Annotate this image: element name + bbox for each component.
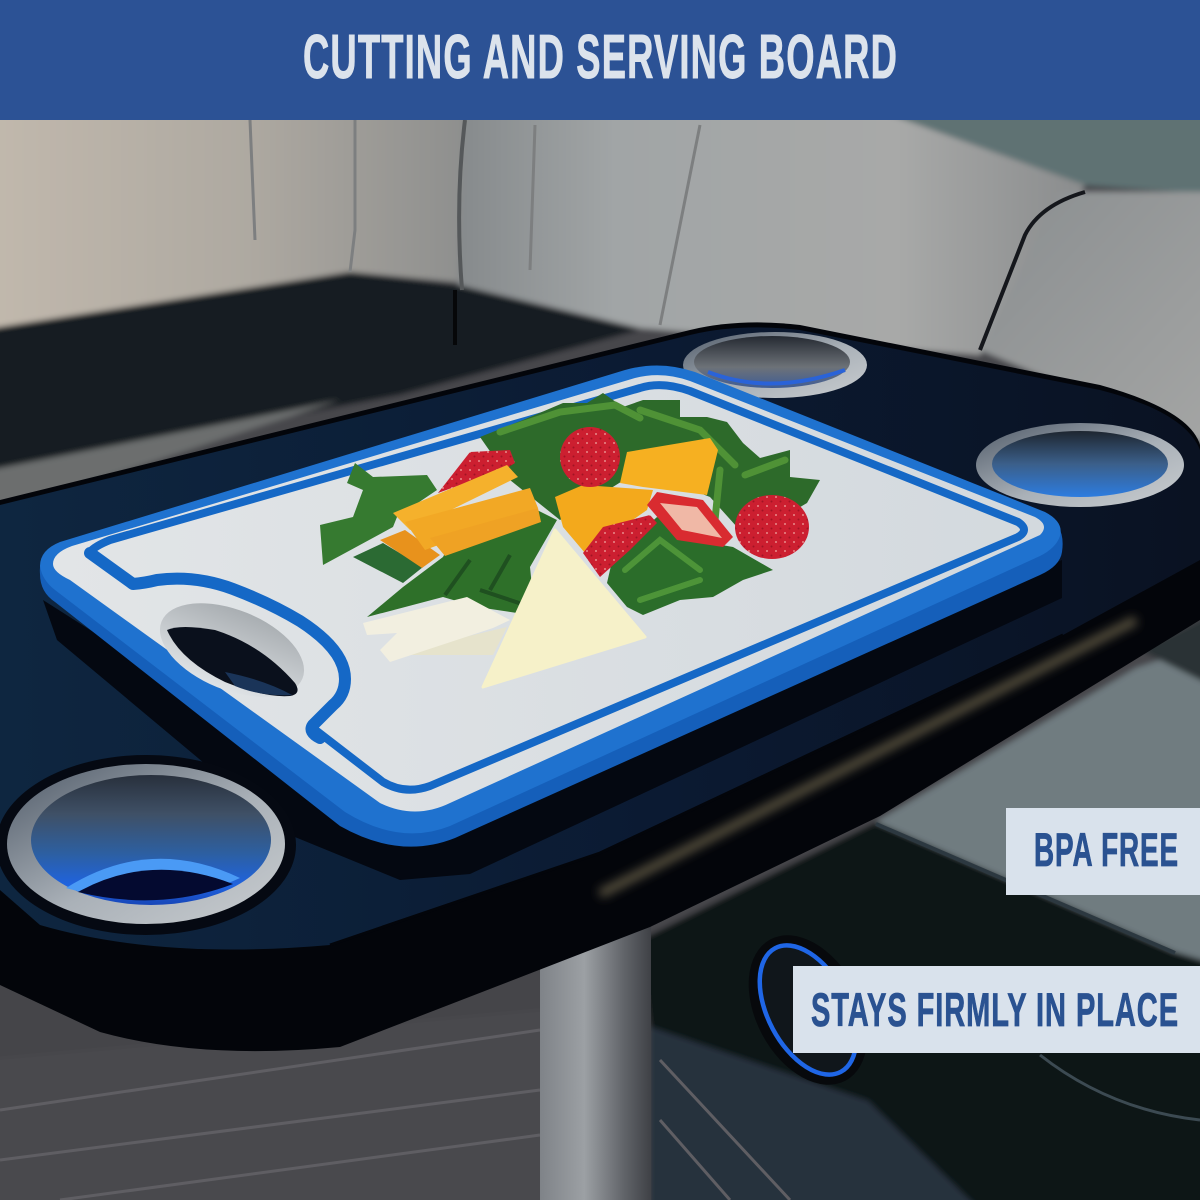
strawberry slice: [647, 492, 733, 547]
table top surface: [0, 327, 1200, 950]
mango top: [620, 438, 718, 495]
panel: cutting board: [40, 365, 1063, 847]
handle cut-out: [147, 584, 317, 716]
board shadow: [43, 560, 1062, 880]
dark seat front: [640, 822, 1200, 1200]
callout: stays firmly in place: [793, 966, 1200, 1053]
table post: [540, 915, 651, 1200]
right backrest: [980, 192, 1200, 450]
floor left: [0, 960, 540, 1200]
title banner: [0, 0, 1200, 120]
icon: cup holder front left: [0, 755, 296, 935]
orange cheese slices: [380, 530, 440, 568]
juice groove: [90, 385, 1024, 790]
table edge highlight: [600, 620, 1136, 894]
board white surface: [53, 375, 1044, 812]
board blue rim: [40, 365, 1061, 833]
cheese wedge: [483, 530, 645, 687]
mango centre: [555, 485, 653, 553]
board side: [40, 368, 1063, 847]
strawberry left: [438, 450, 515, 493]
floor under table, right: [650, 1027, 990, 1200]
icon: air vent with blue light: [725, 915, 891, 1105]
greens: top cluster: [480, 393, 820, 527]
left backrest: [0, 100, 465, 335]
centre backrest: [458, 100, 1085, 355]
icon: cup holder right: [976, 423, 1184, 507]
greens: bottom centre leaf: [367, 510, 557, 617]
table underside and lip: [0, 322, 1200, 1051]
light seat base: [0, 400, 340, 512]
dark lower cushion: [0, 272, 640, 475]
greens: left leaf: [320, 463, 437, 565]
greens: right lower leaf: [607, 517, 773, 615]
white cheese sticks: [397, 627, 507, 655]
strawberry right: [735, 495, 809, 559]
water: [850, 100, 1200, 195]
panel: table: [0, 322, 1200, 1051]
icon: cup holder top: [683, 332, 867, 398]
greens: flat leaf: [353, 543, 423, 583]
strawberry top: [560, 427, 620, 487]
callout: BPA free: [1006, 808, 1200, 895]
strawberry lower: [583, 515, 657, 577]
juice groove at handle: [90, 553, 345, 738]
food: salad and cheese: [320, 393, 820, 687]
right seat base: [876, 640, 1200, 965]
